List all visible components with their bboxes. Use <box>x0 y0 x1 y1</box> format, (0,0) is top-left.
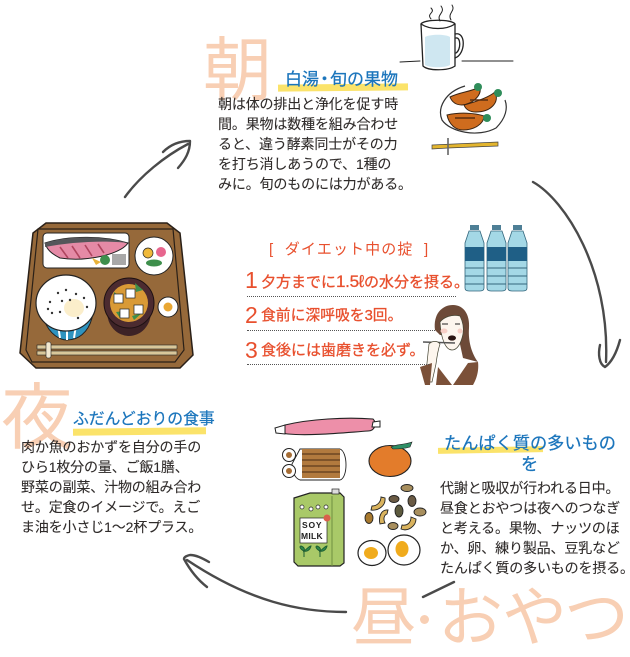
rule 2: 2 <box>245 302 258 328</box>
text: dinner body: ひら1枚分の量、ご飯1膳、 <box>21 459 189 475</box>
heading: lunch and snack: つ <box>564 581 629 654</box>
text: lunch body <box>440 480 630 576</box>
icon: tray with meal <box>20 223 193 368</box>
icon: fish sausage <box>275 418 380 435</box>
highlight: lunch title <box>438 446 543 454</box>
panel: morning <box>203 32 412 192</box>
text: morning body: ると、違う酵素同士がその力 <box>218 136 398 152</box>
icon: water bottles <box>465 225 527 291</box>
icon: boiled eggs <box>358 535 420 566</box>
text: dinner body: せ。定食のイメージで。えご <box>21 499 200 515</box>
rule 3: 3 <box>245 337 258 363</box>
heading: morning kanji: 朝 <box>203 32 272 109</box>
small plate <box>135 237 173 275</box>
panel: diet rules <box>245 241 469 363</box>
heading: rules: [ ダイエット中の掟 ] <box>269 241 429 258</box>
rule 1 <box>245 267 469 293</box>
title: lunch: たんぱく質の多いもの <box>444 433 616 453</box>
icon: mug of hot water <box>400 5 513 70</box>
text: dinner body: 野菜の副菜、汁物の組み合わ <box>21 479 201 495</box>
text: morning body <box>218 96 412 192</box>
miso soup <box>104 278 154 336</box>
rule 1: 1 <box>245 267 258 293</box>
icon: soy milk carton: SOY <box>302 520 322 530</box>
text: lunch body: か、卵、練り製品、豆乳など <box>440 540 620 556</box>
icon: fruit pick <box>432 138 498 155</box>
rule 3: 食後には歯磨きを必ず。 <box>261 342 425 359</box>
rule 3 <box>245 337 425 363</box>
icon: dried fish <box>282 448 346 480</box>
text: morning body: みに。旬のものには力がある。 <box>218 176 412 192</box>
panel: dinner <box>1 379 215 535</box>
rice bowl <box>36 275 96 340</box>
text: dinner body: 肉か魚のおかずを自分の手の <box>21 439 201 455</box>
icon: mandarin orange <box>369 442 412 476</box>
text: morning body: 間。果物は数種を組み合わせ <box>218 116 398 132</box>
text: lunch body: と考える。果物、ナッツのほ <box>440 520 620 536</box>
heading: lunch and snack: や <box>502 581 567 654</box>
icon: soy milk carton: MILK <box>301 531 324 541</box>
text: lunch body: 代謝と吸収が行われる日中。 <box>440 480 619 496</box>
heading: lunch and snack: 昼 <box>351 581 416 654</box>
text: morning body: 朝は体の排出と浄化を促す時 <box>218 96 398 112</box>
text: lunch body: 昼食とおやつは夜へのつなぎ <box>440 500 620 516</box>
rule 1: 夕方までに1.5ℓの水分を摂る。 <box>261 272 469 291</box>
rule 2: 食前に深呼吸を3回。 <box>261 308 402 324</box>
icon: fruit plate <box>441 83 506 133</box>
text: morning body: を打ち消しあうので、1種の <box>218 156 391 172</box>
highlight: dinner title <box>73 427 206 436</box>
chopsticks <box>37 342 177 358</box>
icon: soy milk carton <box>294 489 344 566</box>
title: lunch second line: を <box>521 454 538 474</box>
arrow: lunch to dinner <box>184 555 454 612</box>
title: dinner: ふだんどおりの食事 <box>73 411 215 428</box>
heading: night kanji: 夜 <box>1 379 73 459</box>
small pickle dish <box>158 297 178 317</box>
icon: nuts <box>365 484 426 530</box>
text: dinner body <box>21 439 202 535</box>
highlight: morning title <box>278 83 408 92</box>
text: lunch body: たんぱく質の多いものを摂る。 <box>440 560 630 576</box>
rule 2 <box>245 302 402 328</box>
heading: lunch and snack: お <box>438 581 503 654</box>
title: morning: 白湯・旬の果物 <box>285 70 398 89</box>
panel: lunch and snack <box>351 433 630 654</box>
arrow: dinner to morning <box>125 141 190 197</box>
arrow: morning to lunch <box>533 182 620 367</box>
icon: woman brushing teeth <box>420 305 478 385</box>
heading: lunch and snack <box>351 581 629 654</box>
text: dinner body: ま油を小さじ1～2杯プラス。 <box>21 519 202 535</box>
fish plate <box>43 233 129 268</box>
